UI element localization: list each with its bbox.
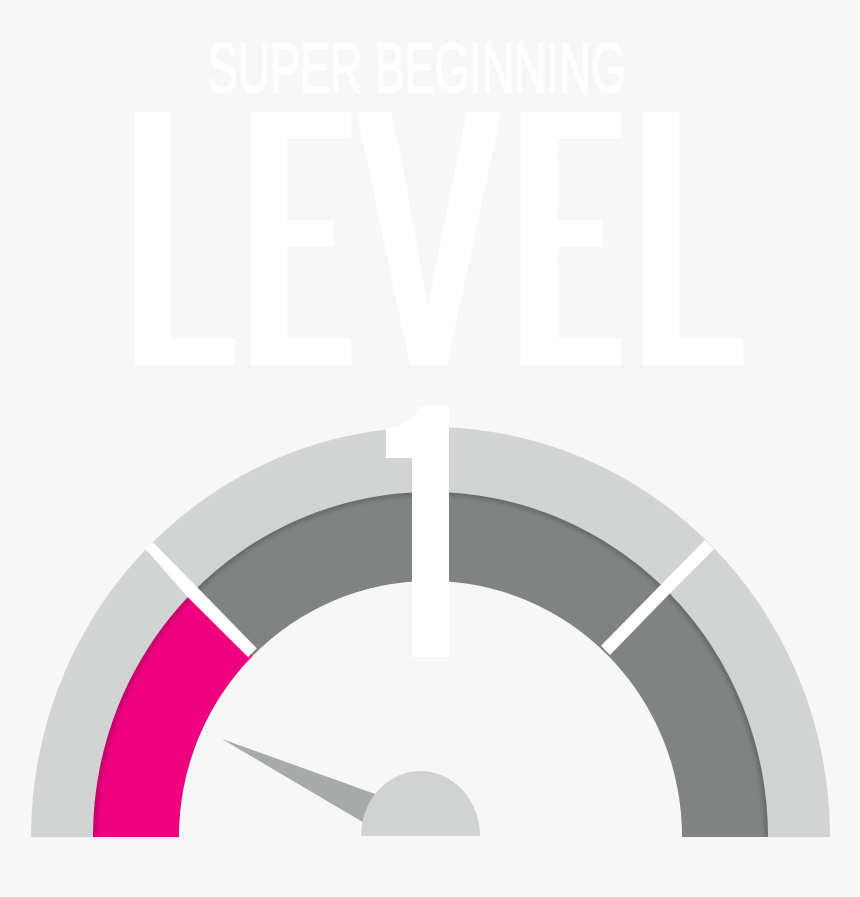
- gauge inner face: [179, 581, 682, 837]
- numeral 1: 1: [345, 333, 504, 733]
- right divider: [601, 540, 714, 655]
- gauge pink level segment: [93, 597, 252, 837]
- infographic canvas: [31, 428, 830, 837]
- left divider: [145, 543, 257, 657]
- title: LEVEL: LEVEL: [121, 34, 770, 444]
- needle hub: [361, 771, 480, 836]
- gauge dark track: [93, 492, 768, 837]
- gauge: [31, 427, 830, 837]
- subtitle: SUPER BEGINNING: [208, 30, 626, 108]
- needle: [222, 739, 378, 824]
- gauge outer band: [31, 427, 830, 837]
- gauge inner shadow: [93, 492, 768, 837]
